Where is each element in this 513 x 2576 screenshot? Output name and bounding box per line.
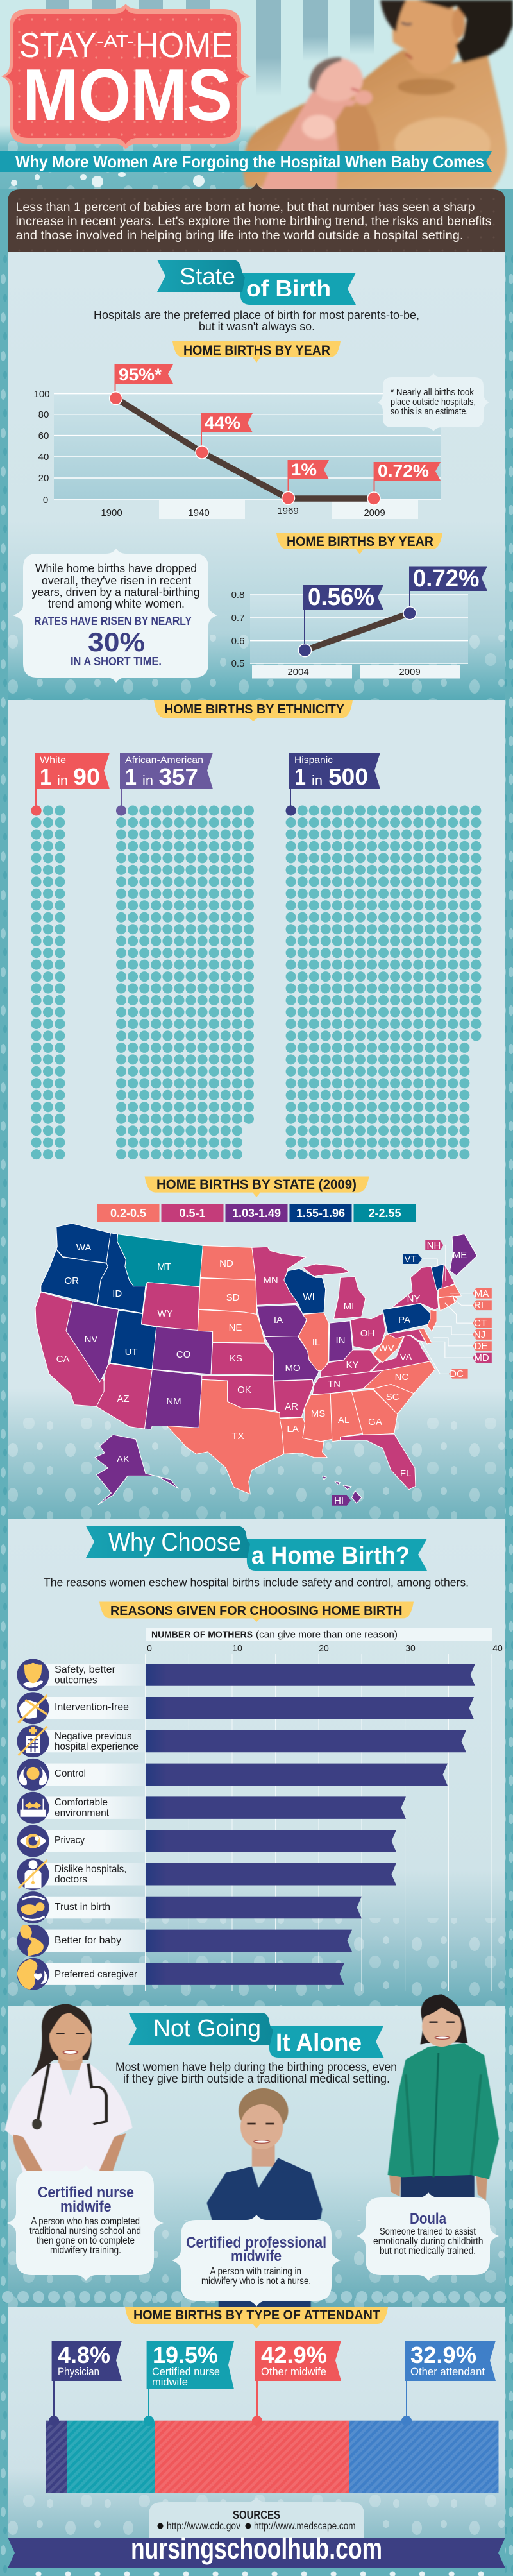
state labels: OR <box>64 1275 79 1286</box>
state labels: NV <box>85 1334 97 1345</box>
callout: rates rising: 30% <box>88 627 145 657</box>
data flag: 95%: 95%* <box>119 365 162 384</box>
heading tag: reasons: REASONS GIVEN FOR CHOOSING HOME BIRTH <box>110 1604 403 1618</box>
bar chart: reasons: 40 <box>492 1642 503 1653</box>
mother's face <box>392 0 459 74</box>
state labels: MA <box>475 1288 489 1299</box>
smile <box>435 2036 450 2039</box>
icon: intervention-free <box>17 1692 49 1724</box>
flag: certified nurse midwife <box>144 2341 234 2426</box>
note bubble: * Nearly all births took <box>391 387 474 398</box>
line chart: 2004-2009: 0.6 <box>231 636 244 647</box>
bubble: doula <box>357 2192 499 2281</box>
droplet texture <box>8 1918 505 2006</box>
state labels: NC <box>395 1372 408 1383</box>
state labels: DC <box>450 1369 464 1379</box>
state labels: CA <box>56 1354 69 1365</box>
bar labels: Negative previous <box>55 1731 132 1742</box>
face <box>422 2006 461 2047</box>
state labels: MO <box>285 1363 301 1374</box>
state labels: RI <box>474 1300 484 1311</box>
bar labels: environment <box>55 1808 110 1818</box>
heading tag: home births by year, recent <box>276 533 442 554</box>
panel: why choose <box>8 1519 505 2006</box>
panel: attendants <box>8 2307 505 2538</box>
scallop decoration <box>8 2291 505 2303</box>
icon: doctor crossed out <box>17 1858 49 1890</box>
dot chart: African-American 1 in 357: 357 <box>159 763 198 790</box>
neck shadow <box>398 78 455 95</box>
bubble: certified nurse midwife: A person who has completed <box>31 2216 140 2227</box>
flag: other midwife <box>252 2341 341 2426</box>
state labels: NY <box>407 1293 420 1304</box>
state labels: WY <box>158 1308 173 1319</box>
bubble: certified professional midwife <box>172 2215 341 2307</box>
state labels: AK <box>117 1454 130 1465</box>
mother's hair <box>417 0 513 63</box>
heading: Not Going It Alone: It Alone <box>276 2029 362 2056</box>
data flag: 44% <box>196 413 253 459</box>
callout: rates rising: overall, they've risen in recent <box>42 574 191 587</box>
zip <box>433 2053 439 2177</box>
heading: Why Choose a Home Birth?: Why Choose <box>108 1528 241 1557</box>
icon: preferred caregiver <box>17 1958 49 1990</box>
bubble: certified nurse midwife: midwifery training. <box>50 2245 121 2256</box>
callout: rates rising: trend among white women. <box>48 597 185 610</box>
state labels: FL <box>400 1468 411 1479</box>
dot chart: African-American 1 in 357: in <box>142 774 153 788</box>
trousers <box>401 2173 475 2199</box>
heading tag: reasons <box>99 1601 414 1622</box>
bar labels: Control <box>55 1768 86 1779</box>
right arm <box>98 2133 126 2173</box>
title badge: HOME <box>135 26 233 65</box>
bar chart: reasons: 10 <box>232 1642 242 1653</box>
line chart: 2004-2009: 0.8 <box>231 590 244 601</box>
eyes <box>247 2121 274 2126</box>
dot chart: Hispanic 1 in 500: in <box>312 774 323 788</box>
state labels: UT <box>125 1347 138 1358</box>
mother's torso <box>243 49 507 191</box>
dot chart: Hispanic 1 in 500: Hispanic <box>294 755 333 765</box>
eyes <box>56 2031 85 2036</box>
callout leader lines <box>421 1245 473 1374</box>
intro sentence <box>94 309 419 333</box>
line chart: 2004-2009 <box>231 565 487 679</box>
baby's hand <box>355 90 373 105</box>
illustration: doula <box>388 1994 499 2201</box>
baby's head <box>310 58 363 101</box>
line chart: 2004-2009: 0.5 <box>231 658 244 669</box>
intro text box: Less than 1 percent of babies are born at home, but that number has seen a sharp <box>15 201 475 214</box>
flag: certified nurse midwife: midwife <box>152 2376 188 2388</box>
heading tag: attendants: HOME BIRTHS BY TYPE OF ATTENDANT <box>133 2308 380 2323</box>
state labels: NE <box>229 1322 242 1333</box>
line chart: home births 1900-2009: 1969 <box>277 506 299 516</box>
state labels: NJ <box>474 1329 485 1340</box>
heading: Why Choose a Home Birth?: a Home Birth? <box>251 1542 410 1569</box>
illustration: certified nurse midwife <box>5 2004 133 2173</box>
map legend: 2-2.55 <box>368 1207 401 1220</box>
bubble: certified nurse midwife: then gone on to complete <box>37 2235 135 2246</box>
data flag: 0.56%: 0.56% <box>308 584 374 611</box>
dot chart: African-American 1 in 357: African-American <box>125 755 203 765</box>
mother's fringe <box>380 0 407 32</box>
bubble: doula: but not medically trained. <box>380 2246 476 2256</box>
heading tag: ethnicity <box>154 700 353 721</box>
state labels: IA <box>274 1315 283 1326</box>
heading tag: state <box>145 1177 369 1197</box>
baby's hair <box>311 59 341 90</box>
flag: physician: Physician <box>58 2366 99 2378</box>
bubble: certified professional midwife: midwifery who is not a nurse. <box>201 2276 311 2287</box>
data flag: 0.72% <box>403 565 487 620</box>
sources: http://www.cdc.gov <box>167 2521 240 2532</box>
bubble: doula: Doula <box>410 2210 447 2228</box>
state labels: KS <box>230 1353 242 1364</box>
panel: ethnicity and state <box>8 700 505 1519</box>
line chart: home births 1900-2009: 100 <box>33 389 50 400</box>
title badge: MOMS <box>22 55 232 136</box>
footer ribbon: nursingschoolhub.com <box>131 2532 382 2565</box>
state labels: SC <box>386 1392 399 1403</box>
bubble: certified nurse midwife: Certified nurse <box>38 2184 134 2201</box>
line chart: 2004-2009: 0.7 <box>231 613 244 624</box>
bubble: certified professional midwife: Certified professional <box>186 2234 326 2251</box>
fringe <box>424 2000 461 2017</box>
heading: State of Birth <box>157 260 356 305</box>
left arm <box>13 2135 42 2173</box>
eyes <box>429 2020 455 2024</box>
map legend: 1.55-1.96 <box>296 1207 345 1220</box>
panel: state of birth background <box>8 252 505 701</box>
state labels: SD <box>226 1292 240 1303</box>
baby highlight <box>302 115 335 139</box>
dot chart: African-American 1 in 357 <box>116 753 249 1155</box>
line chart: home births 1900-2009: 80 <box>38 409 49 420</box>
heading tag: attendants <box>125 2307 388 2328</box>
state labels: ME <box>453 1250 467 1261</box>
panel: not going it alone <box>8 2006 505 2307</box>
line chart: home births 1900-2009: 1940 <box>188 508 210 518</box>
state labels: OH <box>360 1328 374 1339</box>
intro sentence <box>115 2061 397 2086</box>
state labels: AR <box>285 1401 298 1412</box>
bubble: certified nurse midwife: traditional nursing school and <box>29 2226 141 2237</box>
bar labels: Intervention-free <box>55 1702 129 1713</box>
state labels: LA <box>287 1424 299 1435</box>
bar labels: Comfortable <box>55 1797 108 1808</box>
callout: rates rising <box>13 549 217 683</box>
droplet texture <box>8 2493 505 2538</box>
dot chart: African-American 1 in 357: 1 <box>125 763 137 790</box>
state labels: ID <box>112 1288 122 1299</box>
state labels: NM <box>166 1396 181 1407</box>
data flag: 1% <box>282 460 329 504</box>
state labels: AZ <box>117 1394 130 1404</box>
map legend <box>97 1204 416 1222</box>
bubble: doula: emotionally during childbirth <box>373 2236 484 2247</box>
bar chart: reasons: 20 <box>319 1642 329 1653</box>
heading tag: home births by year, recent: HOME BIRTHS BY YEAR <box>287 534 433 549</box>
footer ribbon <box>8 2532 505 2568</box>
sources: SOURCES <box>233 2509 280 2521</box>
jacket <box>388 2043 499 2179</box>
callout: rates rising: IN A SHORT TIME. <box>71 655 162 668</box>
bar labels: hospital experience <box>55 1741 139 1752</box>
subtitle ribbon: Why More Women Are Forgoing the Hospital When Baby Comes <box>15 152 484 171</box>
callout: rates rising: RATES HAVE RISEN BY NEARLY <box>34 615 192 627</box>
illustration: certified professional midwife <box>206 2088 323 2307</box>
footer droplets <box>38 2572 487 2576</box>
bar labels: Dislike hospitals, <box>55 1864 127 1875</box>
sources <box>149 2497 364 2538</box>
smile <box>254 2140 269 2143</box>
state labels: PA <box>398 1315 410 1326</box>
dot chart: white 1 in 90: White <box>40 755 66 765</box>
flag: other attendant: Other attendant <box>410 2366 485 2378</box>
bar chart: reasons: (can give more than one reason) <box>256 1630 398 1640</box>
title badge: -AT- <box>97 31 134 51</box>
scrubs <box>206 2158 323 2222</box>
heading: Why Choose a Home Birth? <box>86 1526 427 1571</box>
lower scrubs <box>219 2297 311 2307</box>
intro sentence: The reasons women eschew hospital births include safety and control, among others. <box>44 1576 469 1589</box>
dot chart: Hispanic 1 in 500 <box>286 753 476 1155</box>
bar labels: Trust in birth <box>55 1902 110 1913</box>
note bubble <box>378 373 489 431</box>
flag: physician <box>49 2341 122 2426</box>
note bubble: place outside hospitals, <box>391 397 476 407</box>
dot chart: Hispanic 1 in 500: 1 <box>294 763 306 790</box>
state labels <box>56 1240 489 1506</box>
icon: trust in birth <box>17 1891 49 1923</box>
state labels: AL <box>338 1415 349 1426</box>
state labels: MD <box>474 1352 489 1363</box>
intro sentence: but it wasn't always so. <box>199 320 315 333</box>
droplet texture <box>8 635 505 701</box>
line chart: 2004-2009: 2004 <box>287 667 309 678</box>
data flag: 0.72%: 0.72% <box>378 461 429 481</box>
state labels: IN <box>336 1335 345 1346</box>
flag: other attendant <box>401 2341 496 2426</box>
bar chart: reasons: 30 <box>405 1642 416 1653</box>
hair <box>239 2088 288 2133</box>
line chart: home births 1900-2009: 60 <box>38 431 49 441</box>
bar chart: reasons <box>38 1628 503 1991</box>
baby's body <box>261 92 357 191</box>
mother's eye <box>401 22 412 24</box>
heading: Not Going It Alone <box>128 2013 383 2058</box>
heading tag: state: HOME BIRTHS BY STATE (2009) <box>156 1177 357 1192</box>
data flag: 0.72%: 0.72% <box>413 565 480 592</box>
icon: hospital crossed out <box>17 1725 49 1757</box>
state labels: ND <box>219 1258 233 1269</box>
flag: physician: 4.8% <box>58 2342 110 2368</box>
mother's hand <box>335 106 380 154</box>
line chart: home births 1900-2009: 1900 <box>101 508 122 518</box>
dot chart: white 1 in 90 <box>31 753 110 1155</box>
state labels: MN <box>263 1275 278 1286</box>
flag: other attendant: 32.9% <box>410 2342 476 2368</box>
bar labels: doctors <box>55 1874 87 1885</box>
state labels: MI <box>344 1301 354 1312</box>
dot chart: white 1 in 90: in <box>57 774 68 788</box>
smile <box>63 2051 78 2054</box>
line chart: home births 1900-2009: 0 <box>43 495 48 506</box>
state labels: KY <box>346 1360 359 1370</box>
bar labels: outcomes <box>55 1675 97 1686</box>
chest piece <box>32 2119 42 2129</box>
dot chart: Hispanic 1 in 500: 500 <box>328 763 368 790</box>
flag: certified nurse midwife: 19.5% <box>153 2342 218 2368</box>
face <box>49 2013 91 2061</box>
bar labels: Better for baby <box>55 1935 121 1946</box>
bar labels: Preferred caregiver <box>55 1969 138 1980</box>
state labels: VT <box>404 1254 417 1265</box>
mother's lips <box>405 54 412 59</box>
intro text box: and those involved in helping bring life into the world outside a hospital setting. <box>15 229 463 243</box>
state labels: DE <box>475 1341 487 1352</box>
jacket sleeve shading <box>406 2074 481 2175</box>
state labels: HI <box>334 1496 344 1506</box>
state labels: CT <box>474 1318 487 1329</box>
heading tag: ethnicity: HOME BIRTHS BY ETHNICITY <box>164 703 345 717</box>
icon: comfortable bed <box>17 1792 49 1824</box>
state tags <box>332 1240 492 1506</box>
bar labels: Safety, better <box>55 1664 116 1675</box>
stethoscope <box>38 2064 106 2124</box>
line chart: home births 1900-2009: 20 <box>38 473 49 484</box>
dot chart: white 1 in 90: 90 <box>73 763 100 790</box>
hair <box>421 1994 468 2045</box>
bar labels: Privacy <box>55 1835 85 1846</box>
title badge: STAY <box>19 26 96 65</box>
icon: privacy eye <box>17 1825 49 1857</box>
line chart: home births 1900-2009 <box>33 364 441 519</box>
state labels: OK <box>237 1385 251 1395</box>
state labels: TN <box>328 1379 341 1390</box>
data flag: 0.72% <box>367 461 441 505</box>
droplet texture <box>8 1418 505 1519</box>
map legend: 0.5-1 <box>179 1207 206 1220</box>
flag: certified nurse midwife: Certified nurse <box>152 2366 220 2378</box>
state labels: GA <box>368 1417 382 1428</box>
line chart: home births 1900-2009: 2009 <box>364 508 385 518</box>
baby's mouth <box>351 89 359 91</box>
intro text box <box>8 183 505 252</box>
data flag: 95% <box>110 364 173 405</box>
mother's ear <box>452 8 465 38</box>
bubble: doula: Someone trained to assist <box>380 2226 476 2237</box>
bubble: certified professional midwife: midwife <box>231 2248 282 2265</box>
data flag: 1%: 1% <box>291 460 317 479</box>
state labels: VA <box>400 1352 412 1363</box>
state labels: TX <box>231 1431 244 1442</box>
state labels: WA <box>76 1242 91 1253</box>
hair parting <box>49 2004 92 2035</box>
state labels: WV <box>378 1343 394 1354</box>
uniform <box>5 2063 133 2173</box>
chest highlight <box>394 117 491 171</box>
state labels: NH <box>427 1240 441 1251</box>
sources: http://www.medscape.com <box>254 2521 356 2532</box>
state labels: IL <box>312 1337 320 1348</box>
illustration: mother holding newborn <box>243 0 513 191</box>
line chart: 2004-2009: 2009 <box>399 667 421 678</box>
state labels: CO <box>176 1349 190 1360</box>
map legend: 1.03-1.49 <box>232 1207 281 1220</box>
note bubble: so this is an estimate. <box>391 406 468 417</box>
bubble: certified nurse midwife: midwife <box>60 2198 112 2215</box>
choropleth map of US states <box>35 1224 492 1506</box>
bubble: certified professional midwife: A person with training in <box>210 2266 301 2277</box>
callout: rates rising: While home births have dropped <box>35 562 197 575</box>
icon: control <box>17 1759 49 1791</box>
icon: safety shield and hand <box>17 1659 49 1691</box>
map legend: 0.2-0.5 <box>110 1207 146 1220</box>
face <box>240 2104 283 2149</box>
hands <box>389 2175 487 2201</box>
heading tag: home births by year: HOME BIRTHS BY YEAR <box>183 343 330 358</box>
data flag: 44%: 44% <box>205 413 240 432</box>
dot chart: white 1 in 90: 1 <box>40 763 52 790</box>
stacked bar: attendants <box>46 2341 499 2493</box>
callout: rates rising: years, driven by a natural-birthing <box>32 586 200 599</box>
heading: State of Birth: of Birth <box>246 275 331 302</box>
intro sentence: Hospitals are the preferred place of birth for most parents-to-be, <box>94 309 419 321</box>
neck <box>252 2143 275 2167</box>
title badge <box>1 4 251 149</box>
bubble: certified nurse midwife <box>7 2165 164 2281</box>
icon: better for baby <box>17 1923 49 1957</box>
flag: other midwife: 42.9% <box>261 2342 327 2368</box>
heading tag: home births by year <box>172 341 341 363</box>
neck <box>58 2055 83 2070</box>
data flag: 0.56% <box>299 584 383 657</box>
flag: other midwife: Other midwife <box>261 2366 326 2378</box>
header illustration background <box>0 0 513 189</box>
state labels: MS <box>311 1408 325 1419</box>
hair <box>31 2004 92 2077</box>
state labels: MT <box>157 1261 171 1272</box>
bar labels <box>55 1664 139 1980</box>
intro text box: increase in recent years. Let's explore the home birthing trend, the risks and benefits <box>15 215 492 228</box>
droplet texture <box>8 2220 505 2307</box>
heading: State of Birth: State <box>180 263 235 289</box>
intro sentence: if they give birth outside a traditional medical setting. <box>123 2072 390 2086</box>
state labels: WI <box>303 1292 315 1302</box>
heading: Not Going It Alone: Not Going <box>153 2015 261 2042</box>
line chart: home births 1900-2009: 40 <box>38 452 49 463</box>
bar chart: reasons: 0 <box>147 1642 152 1653</box>
bar chart: reasons: NUMBER OF MOTHERS <box>151 1630 253 1640</box>
intro sentence: Most women have help during the birthing process, even <box>115 2061 397 2074</box>
